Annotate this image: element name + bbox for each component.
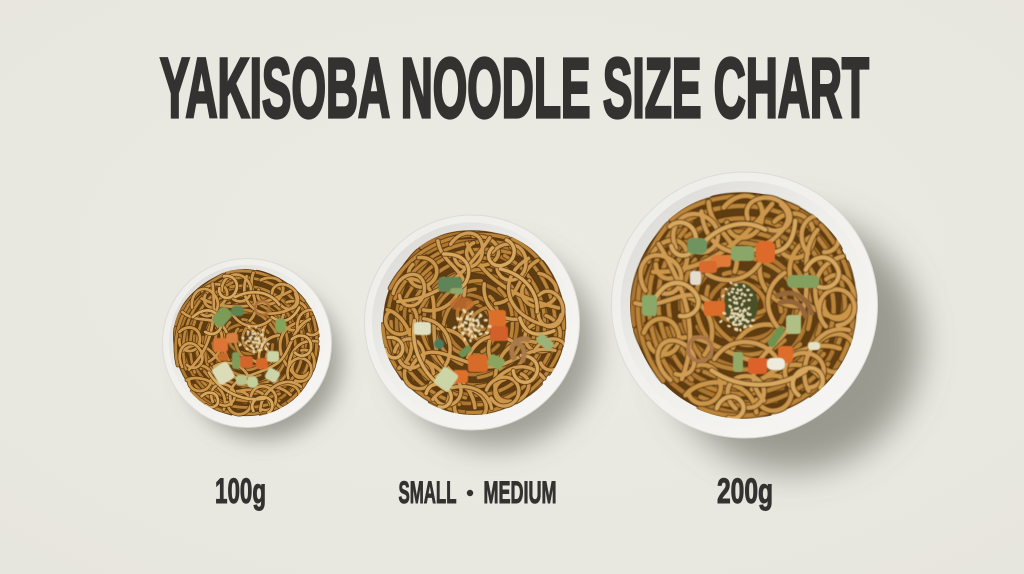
noodles — [546, 106, 944, 504]
noodle bed — [175, 272, 317, 414]
noodles — [149, 246, 343, 441]
bowl: large 200g — [546, 106, 944, 504]
label: small and medium: SMALL — [398, 474, 456, 510]
bowl shadow — [394, 246, 596, 448]
label: 200g: 200g — [717, 472, 773, 511]
noodle bed — [632, 192, 856, 418]
bowl inner wall — [620, 181, 868, 429]
bowl shadow — [185, 283, 341, 439]
label: small and medium — [398, 474, 556, 510]
bowl rim — [364, 215, 580, 430]
label: 100g: 100g — [215, 472, 266, 511]
vegetables and sesame topping — [414, 277, 555, 392]
bowl rim — [612, 172, 878, 438]
vegetables and sesame topping — [210, 301, 286, 388]
label: small and medium: MEDIUM — [484, 474, 556, 510]
bowl inner wall — [372, 222, 572, 422]
bowl inner wall — [169, 265, 325, 421]
bowl rim — [162, 258, 332, 428]
bowl: medium — [302, 151, 646, 495]
noodle bed — [383, 231, 565, 413]
vegetables and sesame topping — [642, 238, 820, 374]
bowl shadow — [664, 215, 920, 471]
bowl: small 100g — [149, 246, 343, 441]
noodles — [302, 151, 646, 495]
